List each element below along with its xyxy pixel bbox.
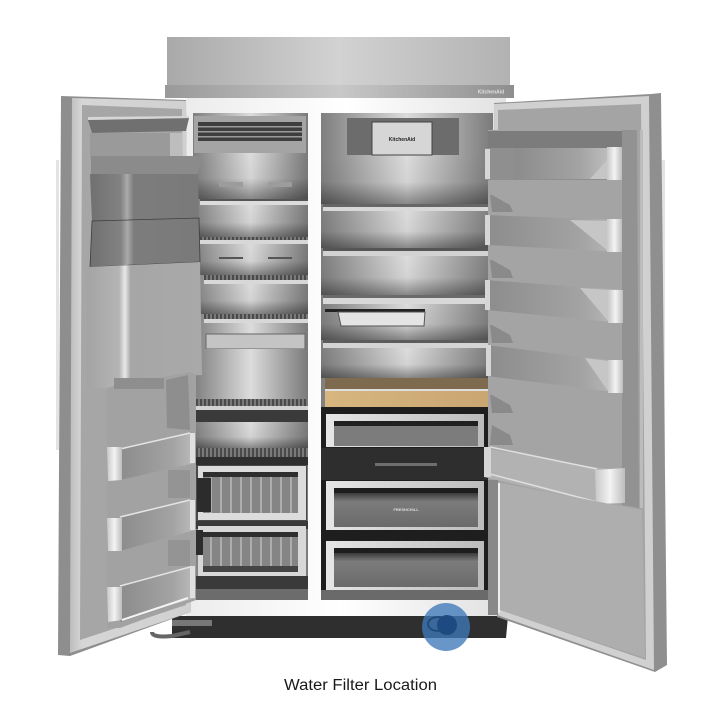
vent bbox=[194, 116, 306, 153]
door shelf brackets bbox=[490, 195, 513, 445]
pull-out tray bbox=[325, 309, 425, 326]
cabinet face frame bbox=[186, 98, 506, 618]
caption: Water Filter Location bbox=[284, 677, 437, 694]
upper door guard bbox=[88, 116, 189, 158]
fridge door bin 3 bbox=[485, 280, 623, 323]
panel: refrigerator compartment bbox=[321, 113, 493, 600]
wood tray bbox=[325, 378, 489, 407]
dispenser panel bbox=[87, 262, 202, 388]
freezer tabs bbox=[219, 182, 292, 259]
hinge bracket bbox=[488, 480, 500, 615]
toe kick bbox=[152, 616, 508, 638]
door bin 3 bbox=[107, 566, 195, 622]
lower door panel bbox=[500, 483, 645, 658]
drawer middle: FRESHCHILL bbox=[393, 507, 419, 512]
fridge door bin 5 bbox=[484, 447, 625, 504]
drawer top bbox=[326, 414, 484, 447]
drawers bbox=[321, 407, 493, 600]
lower freezer panel bbox=[206, 334, 305, 349]
panel: left door bbox=[58, 96, 203, 656]
drawer middle bbox=[326, 481, 484, 530]
freezer basket upper bbox=[194, 465, 307, 521]
freezer floor bbox=[193, 576, 308, 600]
fridge door bin 2 bbox=[485, 215, 622, 252]
shelf band bbox=[193, 349, 308, 465]
top grille panel bbox=[165, 37, 514, 98]
ice bin bbox=[90, 174, 200, 267]
side trim panels bbox=[56, 160, 665, 460]
freezer basket lower bbox=[193, 521, 308, 576]
ice bin lid bbox=[91, 156, 203, 174]
water filter highlight bbox=[422, 603, 470, 651]
door bin 2 bbox=[107, 500, 195, 551]
freezer shelves bbox=[200, 199, 308, 323]
panel: freezer compartment bbox=[193, 113, 308, 600]
fridge door bin 4 bbox=[486, 345, 623, 393]
top grille panel: KitchenAid bbox=[478, 90, 504, 96]
control module: KitchenAid bbox=[389, 137, 415, 143]
door bin 1 bbox=[107, 433, 195, 481]
control band bbox=[321, 448, 491, 480]
drawer bottom bbox=[326, 541, 484, 590]
fridge shelves bbox=[323, 204, 488, 348]
lower door bay bbox=[107, 372, 196, 628]
door liner column bbox=[622, 130, 639, 508]
fridge door bin 1 bbox=[485, 147, 622, 180]
panel: right door bbox=[484, 93, 667, 672]
control module bbox=[347, 118, 459, 155]
bottom white strip bbox=[186, 600, 496, 616]
